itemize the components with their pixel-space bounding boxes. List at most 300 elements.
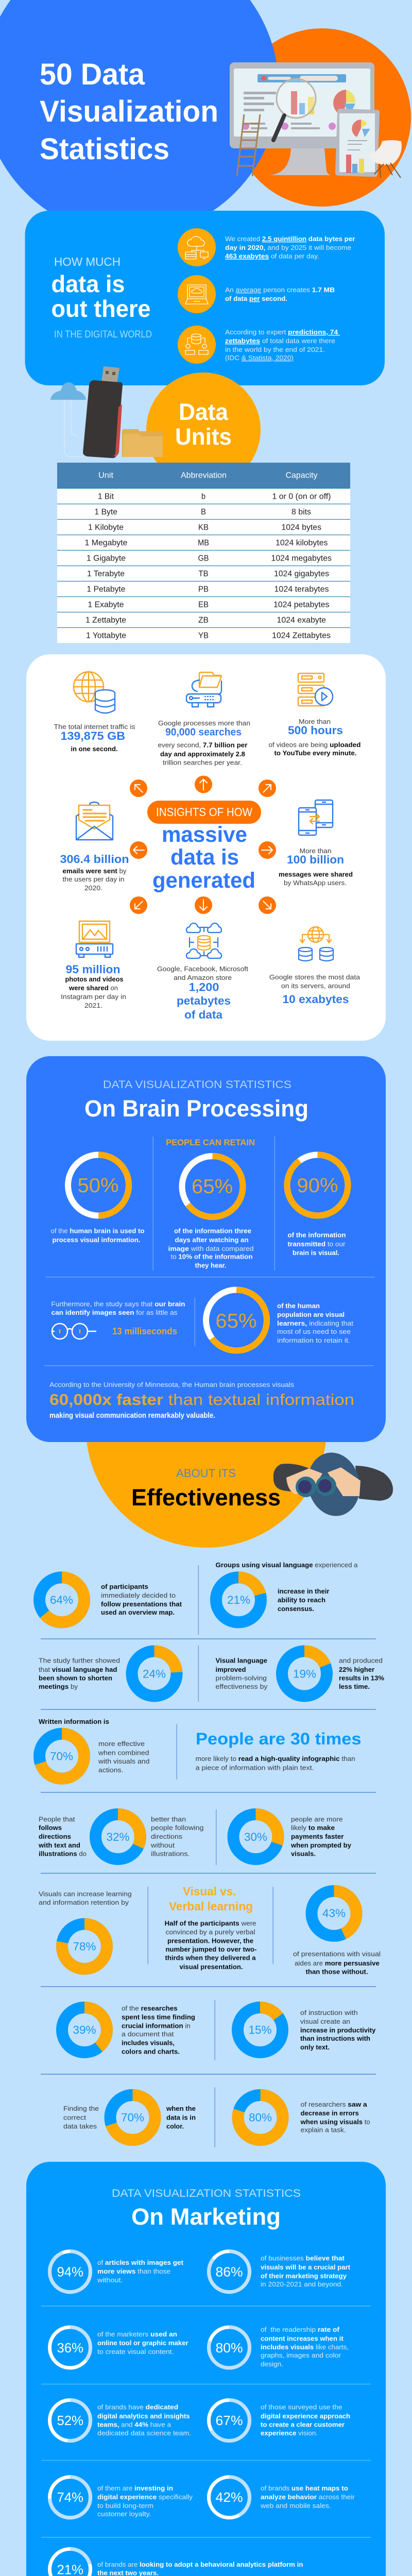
text: half of the participants: convinced by a purely verbal	[166, 1928, 255, 1936]
text: groups using visual language: Groups using visual language experienced a	[215, 1561, 358, 1569]
stat: google searches: Google processes more than	[158, 719, 250, 727]
text: decrease in errors: decrease in errors	[301, 2109, 359, 2117]
centre heading: massive data is generated: generated	[152, 868, 255, 893]
ring: 36 percent: 36%	[57, 2340, 83, 2355]
text: digital experience approach: experience vision.	[261, 2429, 318, 2437]
text: 22 percent higher	[339, 1657, 384, 1690]
heading: visual vs verbal learning	[169, 1885, 253, 1913]
text: directions with illustrations: with text and	[38, 1841, 80, 1849]
stat: whatsapp messages: More than	[300, 847, 332, 855]
donut: 39 percent	[62, 2007, 107, 2053]
panel: how much data	[25, 211, 385, 385]
ring: 36 percent	[49, 2327, 91, 2368]
callout: 60,000x faster	[49, 1381, 354, 1420]
text: half of the participants: Half of the participants were	[165, 1920, 256, 1927]
text: 74 zettabytes	[225, 328, 340, 362]
stat: google searches: day and approximately 2.8	[160, 750, 245, 758]
stat: 13 milliseconds: 13 milliseconds	[112, 1326, 177, 1336]
heading: about its effectiveness: ABOUT ITS	[176, 1467, 236, 1480]
text: decrease in errors	[300, 2100, 370, 2134]
ring: 50 percent: 50%	[77, 1175, 118, 1197]
stat: petabytes of data: petabytes	[177, 994, 231, 1007]
panel: massive data insights	[26, 654, 386, 1041]
text: 22 percent higher: less time.	[339, 1683, 370, 1690]
text: human brain visual: process visual information.	[53, 1236, 140, 1244]
text: retain information: to 10% of the information	[171, 1253, 253, 1261]
text: reach consensus: ability to reach	[278, 1596, 325, 1604]
text: marketers online tool: online tool or graphic maker	[97, 2339, 188, 2347]
ring: 94 percent: 94%	[57, 2264, 83, 2279]
text: reach consensus: consensus.	[278, 1605, 314, 1613]
stat: google searches: trillion searches per year.	[163, 759, 242, 767]
text: half of the participants: thirds when they delivered a	[165, 1954, 256, 1962]
text: problem-solving	[215, 1657, 268, 1690]
text: directions with illustrations: follows	[39, 1824, 62, 1832]
text: productivity: of instruction with	[300, 2009, 358, 2016]
donut: 32 percent	[96, 1815, 140, 1859]
table: data units: PB	[198, 585, 209, 594]
donut: 70 percent effective: 70%	[50, 1750, 73, 1763]
text: visual learners: most of us need to see	[277, 1328, 351, 1335]
centre heading: massive data is generated: data is	[170, 845, 239, 870]
text: researches	[122, 2004, 195, 2056]
illustration: cloud, USB drive and folder	[50, 366, 163, 458]
text: businesses believe: of businesses believe that	[261, 2255, 345, 2262]
text: researches: crucial information in	[122, 2022, 191, 2030]
donut: 24 percent	[132, 1651, 177, 1696]
text: better than: without	[150, 1841, 175, 1849]
text: payments faster: payments faster	[291, 1833, 344, 1840]
centre pill: insights of how	[147, 801, 261, 824]
table: data units: B	[201, 507, 206, 516]
table: data units: 1 Terabyte	[87, 569, 125, 578]
text: researches: colors and charts.	[122, 2048, 180, 2056]
title	[40, 58, 218, 166]
text: 74 zettabytes: zettabytes of total data were there	[225, 337, 335, 345]
text: businesses believe: of their marketing strategy	[261, 2272, 347, 2280]
text: written information: Written information is	[39, 1718, 109, 1725]
text: shorten meetings: The study further showed	[39, 1657, 120, 1665]
ring: 42 percent: 42%	[215, 2489, 243, 2505]
stat: whatsapp messages: by WhatsApp users.	[284, 879, 347, 887]
stat: youtube hours: of videos are being uploaded	[269, 741, 361, 749]
text: visual learners: learners, indicating that	[277, 1319, 353, 1327]
table: data units: 1 Megabyte	[84, 538, 128, 547]
text: decrease in errors: explain a task.	[301, 2126, 346, 2134]
text: half of the participants: number jumped to over two-	[166, 1945, 256, 1953]
donut: 43 percent	[312, 1891, 356, 1936]
text: 74 zettabytes: in the world by the end of 2021.	[225, 346, 325, 353]
ring: 80 percent: 80%	[215, 2340, 243, 2355]
text: overview map: of participants	[101, 1583, 148, 1590]
ring: 65 percent visual learners: 65%	[215, 1310, 256, 1332]
callout: 60,000x faster: than textual information	[168, 1391, 354, 1409]
ring: 94 percent	[49, 2251, 91, 2292]
text: more persuasive	[293, 1950, 381, 1976]
table: data units: TB	[199, 569, 208, 578]
text: payments faster	[290, 1816, 352, 1858]
hero orange circle	[233, 28, 411, 207]
table: data units: 1 Yottabyte	[86, 631, 126, 640]
table: data units: 1 Exabyte	[88, 600, 124, 609]
text: shorten meetings: been shown to shorten	[39, 1674, 112, 1682]
text: human brain visual: of the human brain is used to	[50, 1227, 145, 1234]
stat: google searches	[158, 719, 250, 767]
icon: laptop	[178, 275, 216, 313]
arrows around centre heading	[126, 776, 280, 918]
text: behavioral analytics platform: of brands are looking to adopt a behavioral analytics platform in	[97, 2561, 303, 2568]
text: images seen: Furthermore, the study says that our brain	[52, 1300, 185, 1308]
text: businesses believe: visuals will be a crucial part	[261, 2263, 351, 2271]
table: data units: EB	[198, 600, 209, 609]
donut: 21 percent	[216, 1578, 261, 1622]
text: investing in digital experience: digital experience specifically	[97, 2493, 193, 2501]
heading: on brain processing: On Brain Processing	[84, 1095, 308, 1122]
text: shorten meetings	[39, 1657, 120, 1690]
heading: about its effectiveness	[131, 1467, 281, 1511]
stat: youtube hours: More than	[299, 718, 331, 725]
icon: cloud network	[178, 228, 216, 266]
stat: whatsapp messages	[279, 847, 353, 887]
text: visual learners	[277, 1302, 353, 1344]
callout: 60,000x faster: 60,000x faster	[49, 1391, 163, 1409]
title: Statistics	[40, 132, 169, 166]
text: readership rate: design.	[261, 2360, 283, 2368]
text: dedicated analytics teams	[97, 2403, 191, 2437]
text: digital experience approach	[261, 2403, 350, 2437]
text: problem-solving: improved	[215, 1666, 246, 1673]
text: directions with illustrations	[38, 1816, 87, 1858]
illustration: hands holding binoculars	[273, 1448, 393, 1521]
stat: google searches: every second, 7.7 billion per	[158, 741, 247, 749]
text: finding correct data: correct	[63, 2114, 86, 2122]
text: retain information: image with data compared	[168, 1245, 253, 1252]
stat: whatsapp messages: 100 billion	[287, 853, 344, 866]
donut: 70 percent less time: 70%	[121, 2111, 144, 2124]
text: researches: includes visuals,	[122, 2039, 175, 2046]
title: Visualization	[40, 95, 218, 128]
ring: 52 percent	[49, 2400, 91, 2441]
text: productivity: only text.	[300, 2043, 330, 2051]
centre pill: insights of how: INSIGHTS OF HOW	[156, 805, 252, 819]
icon: phones exchanging messages	[299, 800, 333, 835]
heading: visual vs verbal learning: Visual vs.	[183, 1885, 236, 1898]
text: payments faster: visuals.	[291, 1850, 316, 1858]
text: directions with illustrations: People that	[39, 1816, 75, 1823]
stat: youtube hours: to YouTube every minute.	[274, 749, 356, 757]
text: articles with images: of articles with images get	[97, 2259, 184, 2266]
text: readership rate	[261, 2326, 349, 2368]
text: more persuasive: aides are more persuasive	[295, 1959, 380, 1967]
stat: petabytes of data: Google, Facebook, Microsoft	[157, 965, 248, 973]
text: problem-solving: problem-solving	[215, 1674, 267, 1682]
stat: petabytes of data: 1,200	[188, 981, 219, 993]
text: transmitted to brain: transmitted to our	[287, 1240, 346, 1248]
text: 1.7 MB per second: of data per second.	[225, 295, 287, 302]
callout: 60,000x faster: According to the University of Minnesota, the Human brain processes visuals	[49, 1381, 295, 1388]
text: payments faster: likely to make	[291, 1824, 335, 1832]
text: more persuasive: than those without.	[306, 1968, 368, 1976]
panel: on brain processing	[26, 1056, 386, 1442]
text: readership rate: content increases when it	[261, 2335, 344, 2343]
text: problem-solving: effectiveness by	[215, 1683, 268, 1690]
text: investing in digital experience: to build long-term	[97, 2502, 153, 2510]
stat: emails sent: 306.4 billion	[60, 853, 129, 866]
text: investing in digital experience	[97, 2484, 193, 2518]
stat: google exabytes: on its servers, around	[281, 982, 350, 990]
text: marketers online tool	[97, 2330, 188, 2355]
text: digital experience approach: to create a clear customer	[261, 2421, 345, 2429]
text: articles with images	[97, 2259, 184, 2284]
stat: instagram photos: 2021.	[84, 1002, 102, 1009]
text: 2.5 quintillion data bytes: day in 2020, and by 2025 it will become	[225, 244, 351, 251]
stat: petabytes of data	[157, 965, 248, 1021]
ring: 86 percent	[209, 2251, 249, 2292]
text: combined with visuals: with visuals and	[98, 1757, 149, 1765]
text: productivity: than instructions with	[300, 2035, 370, 2042]
ring: 80 percent	[209, 2327, 249, 2368]
donut: 70 percent less time	[110, 2095, 155, 2140]
table: data units: 1024 Zettabytes	[272, 631, 331, 640]
illustration: monitor with charts, tablet, ladder and chair	[230, 62, 402, 178]
stat: internet traffic: in one second.	[71, 745, 117, 753]
stat: google searches: 90,000 searches	[165, 726, 242, 738]
text: researches: of the researches	[122, 2004, 178, 2012]
hero blue circle	[0, 0, 279, 236]
text: better than: people following	[151, 1824, 204, 1832]
icon: email	[76, 802, 113, 840]
text: shorten meetings: meetings by	[39, 1683, 78, 1690]
text: dedicated analytics teams: digital analytics and insights	[97, 2412, 190, 2420]
donut: 80 percent	[238, 2095, 283, 2140]
ring: 74 percent	[49, 2477, 91, 2518]
table: data units: 1 Gigabyte	[87, 554, 126, 563]
stat: internet traffic: The total internet traffic is	[54, 723, 135, 731]
text: visual learners: of the human	[277, 1302, 320, 1310]
heading: how much data is out there: HOW MUCH	[54, 255, 121, 268]
ring: 65 percent retained	[182, 1156, 243, 1217]
donut: 80 percent: 80%	[249, 2111, 272, 2124]
donut: 43 percent: 43%	[322, 1907, 346, 1920]
icon: glasses	[52, 1324, 96, 1339]
text: overview map: follow presentations that	[101, 1600, 182, 1608]
text: half of the participants: presentation. However, the	[167, 1937, 253, 1945]
text: retain information: of the information three	[174, 1227, 251, 1234]
text: researches: a document that	[122, 2030, 174, 2038]
text: articles with images: more views than those	[97, 2267, 170, 2275]
text: half of the participants: visual presentation.	[179, 1963, 243, 1971]
table: data units: KB	[198, 523, 209, 532]
table: data units: 1 Petabyte	[87, 585, 126, 594]
heading: on marketing: On Marketing	[131, 2204, 281, 2230]
text: better than: illustrations.	[151, 1850, 190, 1858]
stat: instagram photos: photos and videos	[65, 975, 124, 983]
text: finding correct data	[63, 2105, 99, 2130]
text: retain information: days after watching an	[175, 1236, 249, 1244]
text: 22 percent higher: results in 13%	[339, 1674, 384, 1682]
text: heat maps: of brands use heat maps to	[261, 2484, 348, 2492]
stat: instagram photos: were shared on	[68, 984, 118, 992]
text: visual learners: population are visual	[277, 1311, 345, 1318]
text: overview map: immediately decided to	[101, 1591, 176, 1599]
heading: on brain processing	[84, 1079, 308, 1122]
text: 22 percent higher: 22% higher	[339, 1666, 374, 1673]
text: businesses believe: in 2020-2021 and beyond.	[261, 2280, 343, 2288]
ring: 86 percent: 86%	[215, 2264, 243, 2279]
text: 1.7 MB per second	[225, 286, 335, 302]
text: behavioral analytics platform	[97, 2561, 303, 2576]
text: shorten meetings: that visual language had	[39, 1666, 117, 1673]
text: retain information: they hear.	[195, 1261, 227, 1269]
heading: visual vs verbal learning: Verbal learning	[169, 1900, 253, 1913]
text: data in color: color.	[166, 2123, 184, 2130]
heading: data units	[175, 399, 232, 450]
centre heading: massive data is generated: massive	[162, 822, 247, 847]
text: data in color: data is in	[166, 2114, 196, 2122]
table: data units: 1024 gigabytes	[274, 569, 329, 578]
text: images seen	[52, 1300, 185, 1316]
donut: 64 percent	[39, 1578, 84, 1622]
donut: 19 percent	[282, 1651, 327, 1696]
text: heat maps: analyze behavior across their	[261, 2493, 355, 2501]
text: 74 zettabytes: (IDC & Statista, 2020)	[225, 354, 294, 362]
table: data units: ZB	[198, 616, 209, 624]
text: retain information	[168, 1227, 253, 1269]
data units circle	[146, 372, 261, 487]
ring: 74 percent: 74%	[57, 2489, 83, 2505]
table: data units: 1024 megabytes	[271, 554, 332, 563]
text: directions with illustrations: directions	[39, 1833, 71, 1840]
donut: 24 percent: 24%	[143, 1668, 166, 1681]
text: businesses believe	[261, 2255, 351, 2288]
ring: 65 percent visual learners	[206, 1290, 267, 1351]
heading: data units: Units	[175, 423, 232, 450]
callout: people are 30 times: more likely to read a high-quality infographic than	[196, 1755, 355, 1762]
text: 2.5 quintillion data bytes: 463 exabytes of data per day.	[225, 252, 319, 260]
donut: 78 percent: 78%	[73, 1940, 96, 1953]
text: better than	[150, 1816, 204, 1858]
text: reach consensus	[278, 1587, 330, 1613]
text: transmitted to brain: brain is visual.	[293, 1249, 339, 1257]
heading: how much data is out there: data is	[52, 270, 125, 297]
effectiveness amber circle	[85, 1307, 327, 1548]
business growth amber circle	[87, 2498, 327, 2576]
icon: database team	[178, 326, 216, 364]
text: articles with images: without.	[97, 2276, 123, 2284]
text: 2.5 quintillion data bytes: We created 2.5 quintillion data bytes per	[225, 235, 355, 243]
table: data units: 8 bits	[291, 507, 311, 516]
text: digital experience approach: of those surveyed use the	[261, 2403, 342, 2411]
stat: emails sent	[60, 853, 129, 892]
table: data units: 1024 bytes	[281, 523, 321, 532]
text: productivity: visual create an	[300, 2018, 350, 2025]
table: data units: 1 Bit	[98, 492, 114, 501]
text: productivity: increase in productivity	[300, 2026, 376, 2034]
stat: youtube hours: 500 hours	[288, 724, 343, 737]
ring: 42 percent	[209, 2477, 249, 2518]
text: dedicated analytics teams: of brands have dedicated	[97, 2403, 178, 2411]
text: reach consensus: increase in their	[278, 1587, 330, 1595]
icon: globe and databases	[299, 927, 333, 961]
label: people can retain: PEOPLE CAN RETAIN	[166, 1138, 255, 1147]
donut: 19 percent: 19%	[293, 1668, 316, 1681]
ring: 50 percent	[68, 1155, 129, 1216]
callout: people are 30 times	[196, 1730, 362, 1772]
stat: google exabytes: Google stores the most data	[269, 973, 360, 981]
stat: petabytes of data: of data	[184, 1008, 223, 1021]
centre heading: massive data is generated	[152, 822, 255, 893]
donut: 15 percent	[238, 2007, 282, 2053]
donut: 64 percent: 64%	[50, 1594, 73, 1606]
stat: youtube hours	[269, 718, 361, 757]
text: finding correct data: Finding the	[63, 2105, 99, 2112]
stat: instagram photos: 95 million	[66, 963, 121, 976]
text: heat maps	[260, 2484, 355, 2510]
table: data units: 1 Kilobyte	[88, 523, 124, 532]
text: combined with visuals: actions.	[98, 1766, 124, 1774]
text: 2.5 quintillion data bytes	[225, 235, 355, 260]
ring: 65 percent retained: 65%	[192, 1176, 233, 1198]
text: readership rate: graphs, images and color	[261, 2351, 341, 2359]
text: better than: directions	[151, 1833, 183, 1840]
text: payments faster: when prompted by	[290, 1841, 352, 1849]
table: data units: 1024 petabytes	[273, 600, 330, 609]
heading: on marketing: DATA VISUALIZATION STATISTICS	[112, 2188, 301, 2199]
icon: servers with play button	[298, 673, 333, 706]
table: data units	[57, 463, 350, 643]
text: more persuasive: of presentations with visual	[293, 1950, 381, 1958]
table: data units: Abbreviation	[181, 471, 227, 480]
donut: 21 percent: 21%	[227, 1594, 250, 1606]
stat: google exabytes: 10 exabytes	[282, 993, 349, 1006]
text: human brain visual	[50, 1227, 145, 1244]
donut: 39 percent: 39%	[73, 2023, 96, 2036]
stat: internet traffic: 139,875 GB	[61, 730, 125, 742]
stat: emails sent: the users per day in	[63, 875, 125, 883]
table: data units: 1 or 0 (on or off)	[272, 492, 331, 501]
stat: google exabytes	[269, 973, 360, 1006]
title: 50 Data	[40, 58, 145, 91]
text: investing in digital experience: customer loyalty.	[97, 2510, 151, 2518]
icon: folder and router	[186, 672, 221, 707]
text: 22 percent higher: and produced	[339, 1657, 383, 1665]
text: transmitted to brain: of the information	[287, 1231, 346, 1239]
text: combined with visuals: more effective	[98, 1740, 145, 1748]
stat: instagram photos	[61, 963, 126, 1009]
text: marketers online tool: of the marketers used an	[97, 2330, 177, 2338]
heading: about its effectiveness: Effectiveness	[131, 1484, 281, 1511]
ring: 90 percent: 90%	[297, 1175, 338, 1197]
text: productivity	[300, 2009, 376, 2051]
stat: whatsapp messages: messages were shared	[279, 871, 353, 878]
stat: petabytes of data: and Amazon store	[174, 974, 232, 981]
heading: on brain processing: DATA VISUALIZATION STATISTICS	[103, 1079, 291, 1091]
table: data units: b	[201, 492, 205, 501]
text: combined with visuals: when combined	[98, 1749, 149, 1757]
text: data in color	[166, 2105, 196, 2130]
table: data units: Unit	[98, 471, 114, 480]
text: dedicated analytics teams: dedicated data science team.	[97, 2429, 191, 2437]
heading: how much data is out there: out there	[52, 295, 150, 322]
donut: 15 percent: 15%	[248, 2023, 272, 2036]
text: better than: better than	[151, 1816, 186, 1823]
icon: photo on server	[76, 921, 113, 957]
panel: on marketing	[26, 2162, 386, 2576]
text: payments faster: people are more	[291, 1816, 343, 1823]
table: data units: 1 Byte	[95, 507, 117, 516]
text: dedicated analytics teams: teams, and 44% have a	[97, 2421, 171, 2429]
donut: 30 percent	[233, 1815, 278, 1859]
